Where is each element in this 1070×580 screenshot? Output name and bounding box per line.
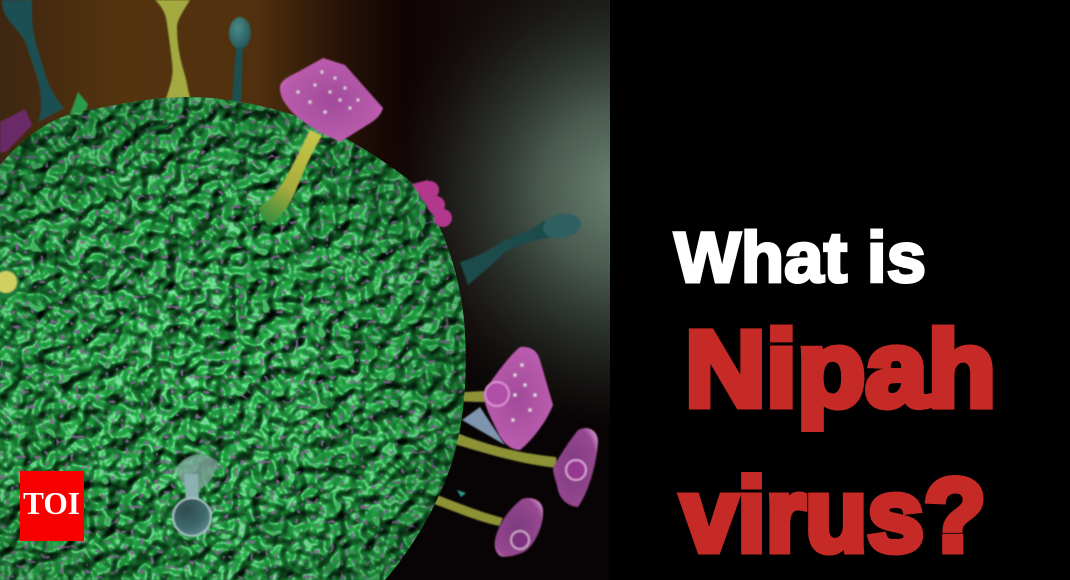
headline: virus?: virus? — [681, 458, 986, 574]
headline: What is: What is — [674, 219, 926, 298]
spike: right — [460, 211, 583, 285]
stalk: top — [155, 0, 192, 102]
photo background — [0, 0, 610, 580]
headline: Nipah: Nipah — [685, 308, 996, 429]
stalk on sphere: upper — [258, 130, 322, 226]
sphere: green virus body — [0, 97, 466, 580]
speck: teal fragment — [457, 490, 466, 497]
protein cap: small upper right — [412, 180, 452, 227]
spike: top centre — [229, 17, 251, 102]
wedge: blue-grey gap — [462, 407, 505, 445]
stalk: right C — [423, 490, 503, 526]
bump: green — [70, 92, 88, 118]
stalk: right A — [396, 389, 486, 402]
teal spikes behind sphere — [2, 0, 583, 285]
spike: top left — [2, 0, 64, 122]
protein cap: right B — [553, 428, 598, 507]
small green bump and left cap — [0, 92, 88, 152]
logo: TOI — [20, 471, 84, 541]
right black panel — [610, 0, 1070, 580]
left edge stalk fragment — [0, 267, 20, 299]
stalk: right B — [448, 430, 558, 468]
photo: virus illustration — [0, 0, 610, 580]
stalks behind sphere — [155, 0, 558, 526]
surface knob — [173, 454, 218, 536]
protein cap: right C — [495, 498, 543, 557]
logo: TOI: TOI — [23, 485, 80, 521]
protein cap: right A — [483, 347, 553, 450]
cap: left edge — [0, 109, 32, 152]
protein cap: large upper — [280, 58, 383, 142]
